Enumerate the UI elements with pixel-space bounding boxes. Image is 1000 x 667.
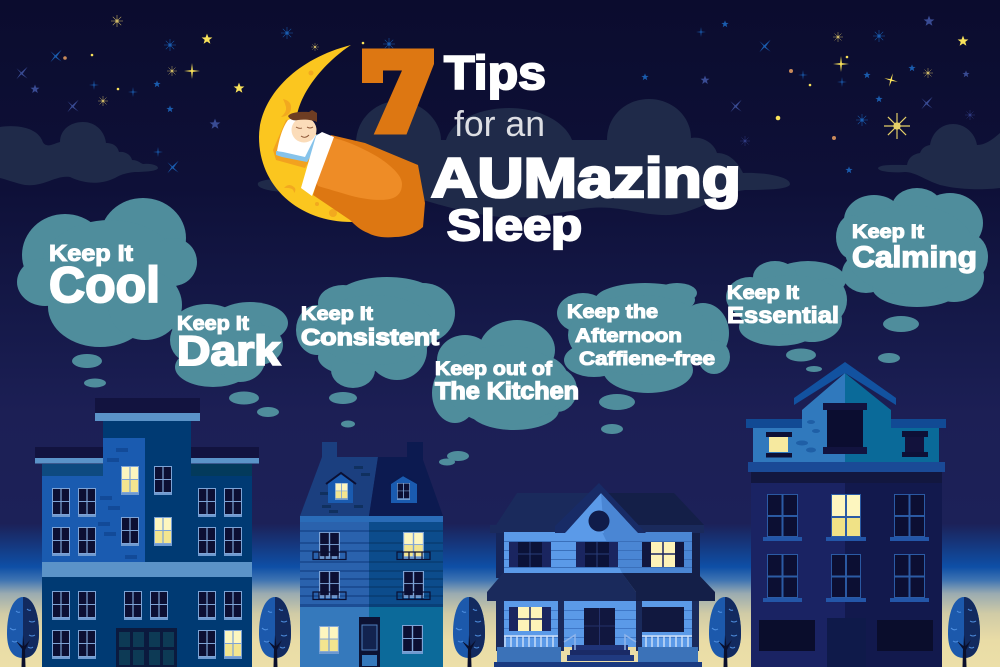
blanket <box>313 135 425 237</box>
thought bubble: Keep It Cool <box>17 198 197 388</box>
title: for an <box>454 103 545 144</box>
blanket highlight <box>316 138 402 200</box>
illustration: man sleeping on crescent moon <box>259 45 425 237</box>
head <box>292 118 316 142</box>
gable <box>565 493 638 533</box>
number 7 <box>362 48 434 134</box>
title: AUMazing <box>431 146 741 209</box>
thought bubble: Keep out of The Kitchen: The Kitchen <box>435 378 579 405</box>
thought bubble: Keep the Afternoon Caffiene-free: Caffiene-free <box>579 349 715 370</box>
thought bubble: Keep It Dark <box>170 302 288 417</box>
attic <box>753 428 845 462</box>
thought bubble: Keep out of The Kitchen <box>432 320 579 466</box>
upper shuttered windows <box>509 542 684 567</box>
title <box>431 46 741 250</box>
trees <box>7 597 980 667</box>
porch roof <box>487 573 636 601</box>
thought bubble: Keep the Afternoon Caffiene-free: Afternoon <box>575 326 682 347</box>
lower wall <box>504 601 692 647</box>
title: Tips <box>444 46 546 99</box>
moon craters <box>281 70 337 217</box>
thought bubble: Keep It Consistent: Keep It <box>301 304 374 325</box>
lower windows and door <box>509 607 684 645</box>
pillow <box>277 116 318 160</box>
thought bubble: Keep It Calming: Calming <box>852 241 977 274</box>
porch railings <box>504 636 692 647</box>
thought bubble: Keep It Dark: Dark <box>177 327 281 374</box>
building 3: suburban house <box>487 483 715 667</box>
thought bubble: Keep It Consistent <box>296 277 455 428</box>
upper wall <box>504 532 692 573</box>
thought bubble: Keep It Essential <box>726 261 847 372</box>
purple stars <box>16 16 970 129</box>
ground floor panels <box>759 618 933 667</box>
thought bubble: Keep the Afternoon Caffiene-free: Keep the <box>567 302 658 323</box>
townhouse windows and balconies <box>313 532 430 654</box>
blanket fold <box>301 132 334 196</box>
large sunburst <box>884 113 910 139</box>
tall windows <box>763 494 929 602</box>
building 1 garage door <box>116 628 177 667</box>
attic windows <box>766 403 928 458</box>
thought bubble: Keep It Consistent: Consistent <box>301 324 439 350</box>
blue crosses and dots <box>50 20 916 173</box>
building 1 windows <box>50 466 244 659</box>
orange dots <box>63 56 836 140</box>
stone base <box>497 647 561 662</box>
thought bubble: Keep It Cool: Keep It <box>49 240 133 266</box>
building 1: apartment block <box>35 398 259 667</box>
porch posts <box>496 601 699 651</box>
yellow stars <box>91 34 968 120</box>
yellow sunbursts <box>98 15 933 106</box>
building 4: tall dark townhouse <box>746 362 946 667</box>
townhouse door <box>359 617 380 667</box>
thought bubble: Keep It Calming: Keep It <box>852 222 925 243</box>
thought bubble: Keep It Essential: Essential <box>727 302 839 328</box>
thought bubble: Keep It Dark: Keep It <box>177 313 249 335</box>
closed eyes and smile <box>296 127 313 137</box>
building 2: narrow townhouse <box>300 442 443 667</box>
thought bubble: Keep the Afternoon Caffiene-free <box>557 283 730 434</box>
thought bubble: Keep out of The Kitchen: Keep out of <box>435 359 553 380</box>
dark background clouds <box>0 99 1000 218</box>
pajama sleeve and collar <box>276 133 323 162</box>
thought bubble: Keep It Cool: Cool <box>49 257 160 313</box>
purple bursts <box>740 110 975 146</box>
hair <box>288 110 317 122</box>
dormers <box>326 473 419 503</box>
title: Sleep <box>447 201 582 250</box>
thought bubble: Keep It Essential: Keep It <box>727 283 800 304</box>
crescent moon <box>259 45 372 222</box>
moon shadow around sleeper <box>273 118 322 168</box>
front steps <box>564 635 636 661</box>
stars <box>16 15 975 173</box>
blue bursts <box>164 27 885 126</box>
attic gable roof <box>794 362 896 405</box>
thought bubble: Keep It Calming <box>836 188 988 363</box>
